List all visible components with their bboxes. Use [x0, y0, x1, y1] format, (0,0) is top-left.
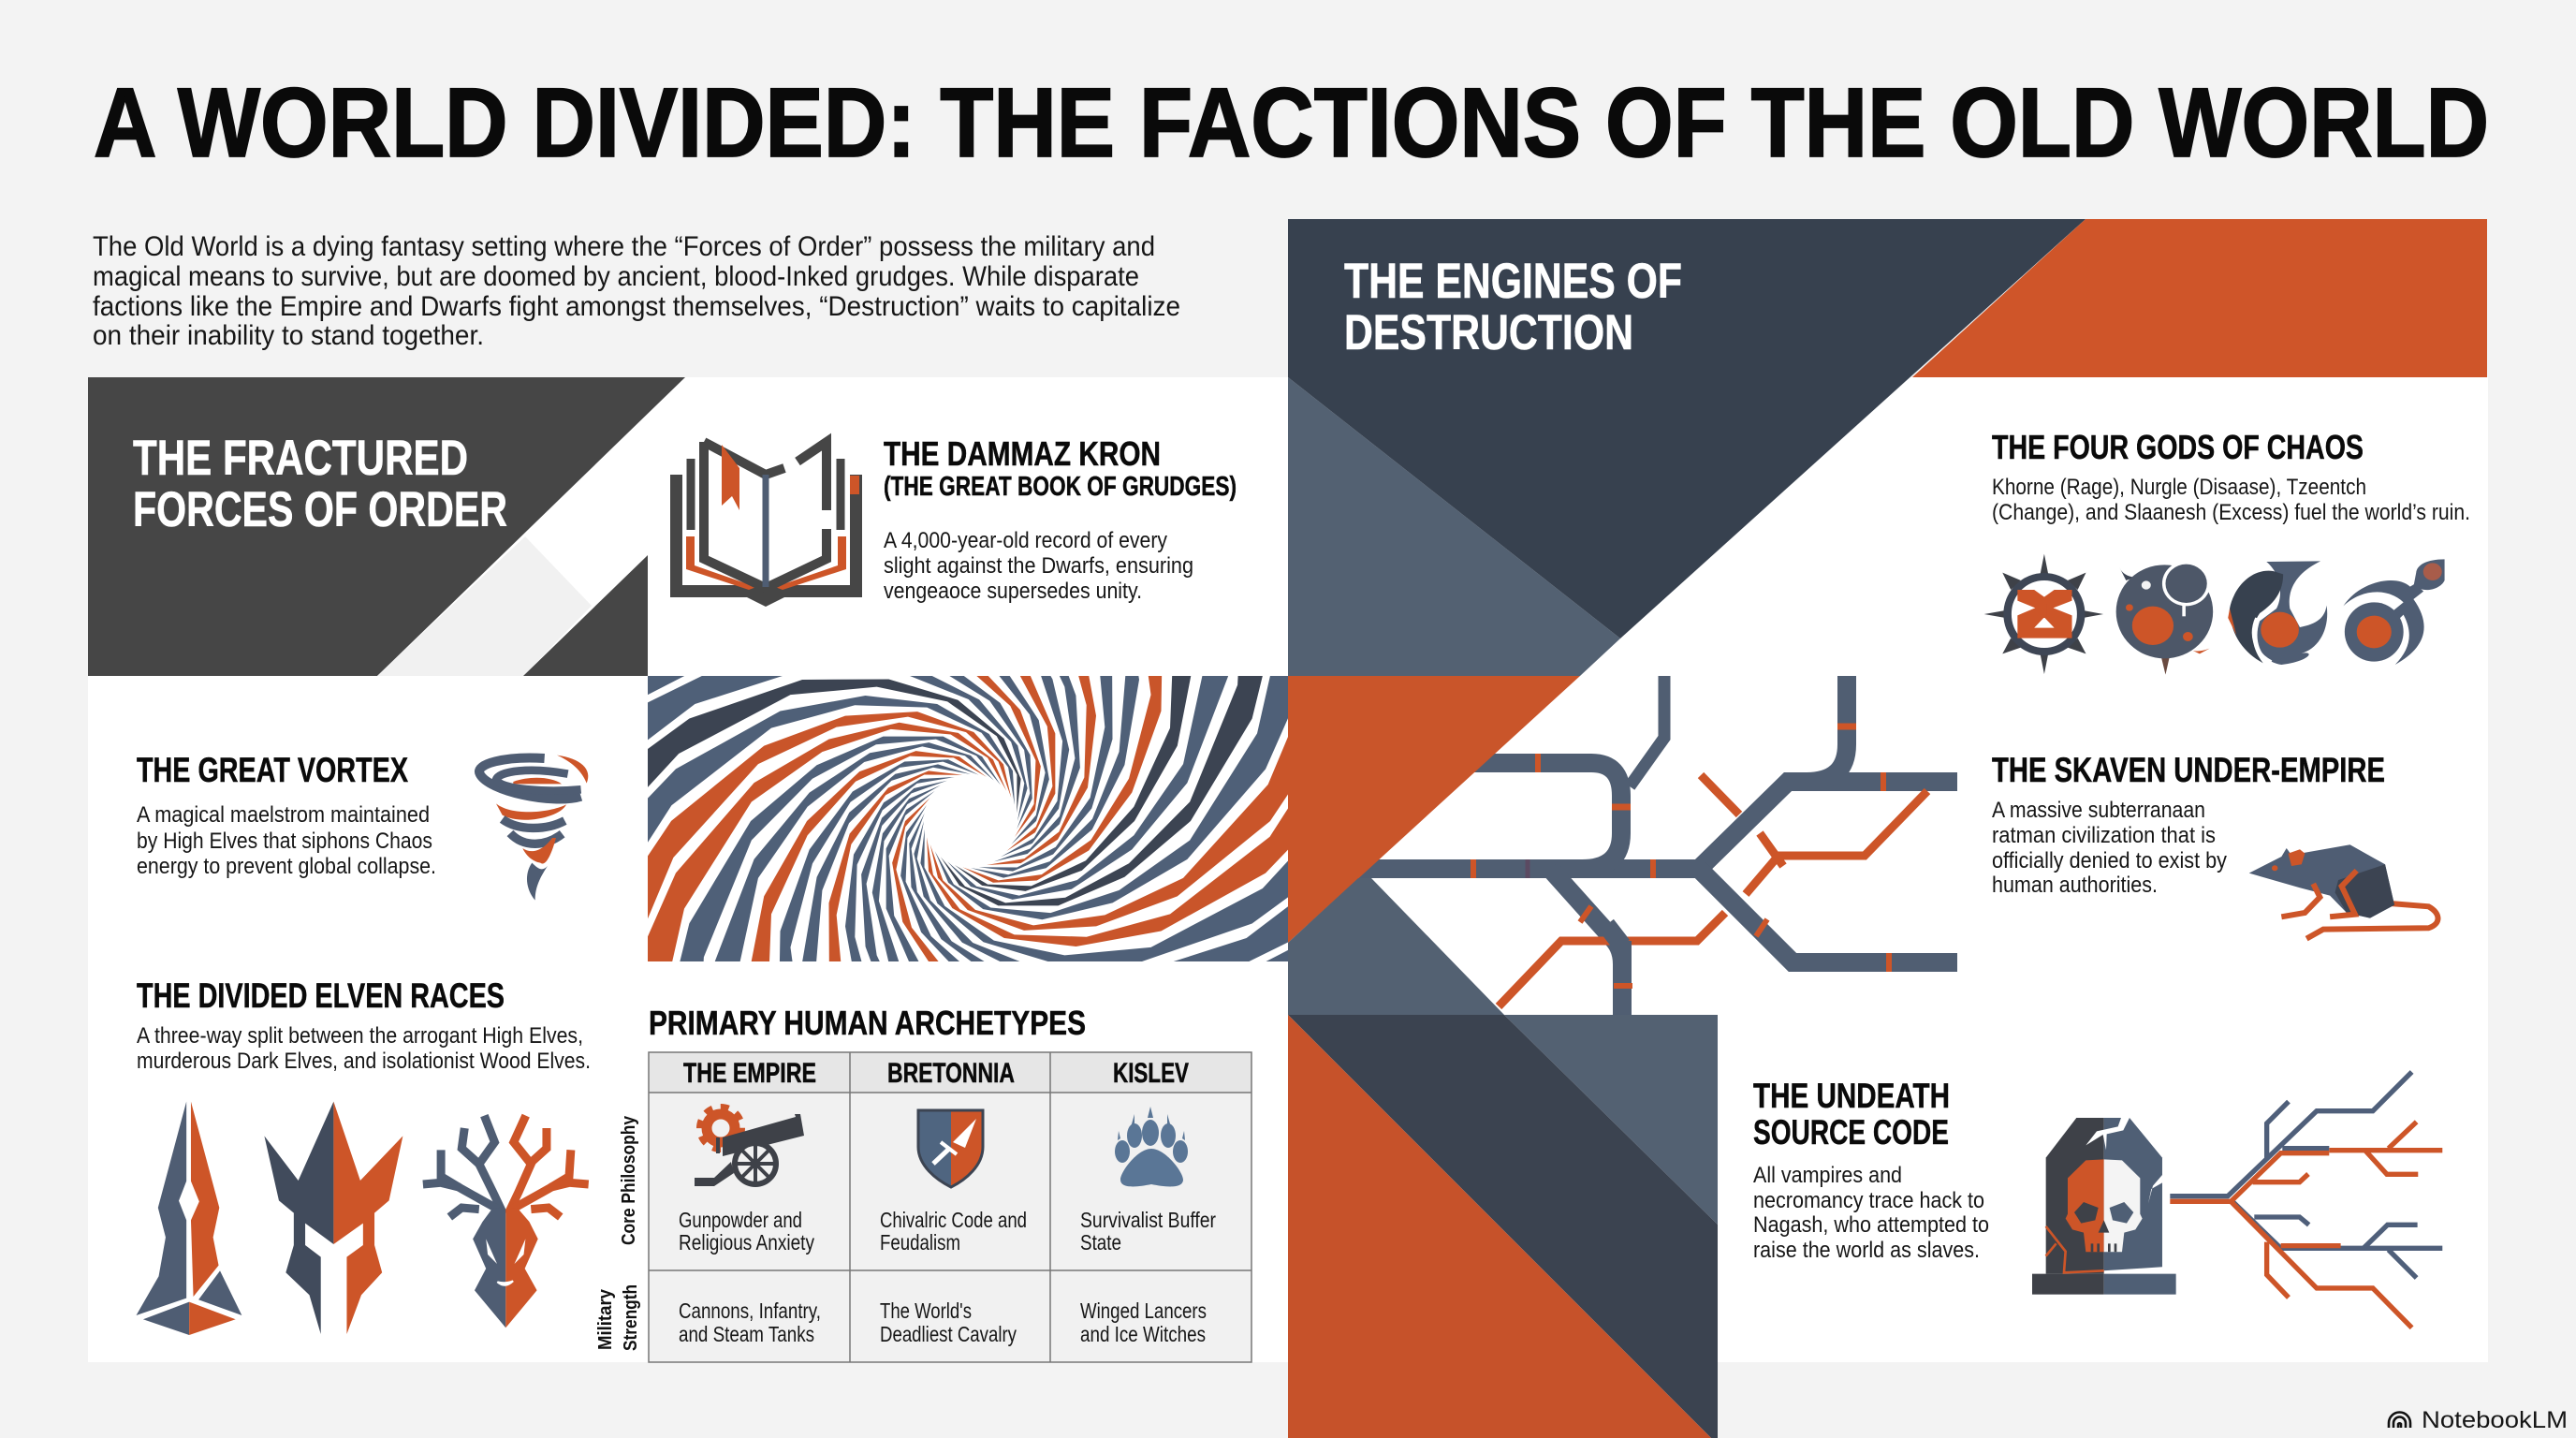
row label: military strength [595, 1284, 641, 1351]
intro text: magical means to survive, but are doomed by ancient, blood-Inked grudges. While disparate [93, 261, 1139, 292]
text: skaven under-empire: ratman civilization that is [1992, 823, 2216, 848]
row label: core philosophy: Core Philosophy [619, 1115, 639, 1245]
vortex artwork [648, 676, 1288, 961]
text: dammaz kron: slight against the Dwarfs, ensuring [884, 553, 1193, 579]
icon: tombstone skull [2032, 1118, 2176, 1295]
diagram: nagash lineage tree [2170, 1072, 2442, 1328]
row label: military strength: Military [595, 1288, 616, 1350]
intro text: The Old World is a dying fantasy setting where the “Forces of Order” possess the military and [93, 231, 1155, 262]
panel: forces of order [88, 377, 1406, 1362]
text: four gods of chaos: THE FOUR GODS OF CHAOS [1992, 428, 2364, 466]
text: dammaz kron: (THE GREAT BOOK OF GRUDGES) [884, 472, 1237, 502]
text: dammaz kron: A 4,000-year-old record of every [884, 528, 1167, 553]
header banner: fractured forces of order: THE FRACTURED [133, 431, 468, 486]
cell text: military strength: and Ice Witches [1080, 1322, 1206, 1346]
icon: nurgle [2116, 561, 2213, 675]
text: divided elven races: A three-way split between the arrogant High Elves, [137, 1023, 583, 1049]
cell text: military strength: Winged Lancers [1080, 1299, 1207, 1323]
cell text: core philosophy: State [1080, 1230, 1121, 1255]
row label: military strength: Strength [621, 1284, 641, 1351]
text: undeath source code: THE UNDEATH [1753, 1077, 1950, 1115]
table grid [649, 1052, 1251, 1362]
column headers: KISLEV [1113, 1058, 1189, 1089]
intro text: on their inability to stand together. [93, 320, 484, 351]
text: dammaz kron [884, 434, 1237, 604]
text: skaven under-empire [1992, 751, 2385, 898]
text: dammaz kron: vengeaoce supersedes unity. [884, 579, 1142, 604]
icon: rat [2249, 844, 2437, 939]
text: skaven under-empire: A massive subterranaan [1992, 798, 2205, 823]
cell text: core philosophy: Survivalist Buffer [1080, 1208, 1216, 1232]
cell text: core philosophy [679, 1208, 1216, 1255]
table: primary human archetypes [595, 1004, 1251, 1362]
icon: tzeentch [2228, 561, 2327, 665]
text: skaven under-empire: THE SKAVEN UNDER-EMPIRE [1992, 751, 2385, 789]
text: undeath source code: Nagash, who attempted to [1753, 1212, 1989, 1238]
cell text: core philosophy: Gunpowder and [679, 1208, 802, 1232]
cell text: core philosophy: Chivalric Code and [880, 1208, 1027, 1232]
column headers: BRETONNIA [887, 1058, 1015, 1089]
column headers [683, 1058, 1189, 1089]
text: divided elven races: THE DIVIDED ELVEN RACES [137, 976, 505, 1015]
background geometry [1288, 219, 2487, 1438]
cell text: military strength: The World's [880, 1299, 972, 1323]
intro text [93, 231, 1180, 351]
text: undeath source code [1753, 1077, 1989, 1263]
text: undeath source code: SOURCE CODE [1753, 1113, 1949, 1152]
icon: book of grudges [670, 442, 862, 607]
text: undeath source code: raise the world as slaves. [1753, 1238, 1980, 1263]
cell text: core philosophy: Feudalism [880, 1230, 960, 1255]
icon: high elves spire [137, 1102, 242, 1335]
header banner: fractured forces of order [88, 377, 685, 676]
text: divided elven races: murderous Dark Elves, and isolationist Wood Elves. [137, 1049, 591, 1074]
diagram: skaven tunnels [1348, 676, 1957, 1020]
cell text: military strength: Deadliest Cavalry [880, 1322, 1017, 1346]
icon: bretonnia shield [918, 1110, 983, 1187]
text: undeath source code: All vampires and [1753, 1163, 1902, 1188]
text: dammaz kron: THE DAMMAZ KRON [884, 434, 1161, 473]
header: engines of destruction [1344, 254, 1682, 360]
text: skaven under-empire: officially denied to exist by [1992, 848, 2227, 873]
text: four gods of chaos [1992, 428, 2470, 525]
text: divided elven races [137, 976, 591, 1074]
text: great vortex: THE GREAT VORTEX [137, 751, 408, 789]
header: engines of destruction: DESTRUCTION [1344, 305, 1633, 360]
cell text: military strength: and Steam Tanks [679, 1322, 814, 1346]
text: skaven under-empire: human authorities. [1992, 873, 2158, 898]
column headers: THE EMPIRE [683, 1058, 816, 1089]
cell text: military strength [679, 1299, 1207, 1346]
text: great vortex: by High Elves that siphons Chaos [137, 829, 432, 854]
icon: dark elves helm [264, 1102, 402, 1334]
cell text: military strength: Cannons, Infantry, [679, 1299, 821, 1323]
icon: bear paw [1115, 1107, 1188, 1186]
text: four gods of chaos: Khorne (Rage), Nurgle (Disaase), Tzeentch [1992, 475, 2366, 500]
text: great vortex: A magical maelstrom maintained [137, 802, 430, 828]
intro text: factions like the Empire and Dwarfs fight amongst themselves, “Destruction” waits to capitalize [93, 291, 1180, 322]
icon: cannon and gear [695, 1107, 804, 1186]
table heading: PRIMARY HUMAN ARCHETYPES [649, 1004, 1086, 1042]
icon: wood elves stag [423, 1116, 589, 1328]
header banner: fractured forces of order: FORCES OF ORDER [133, 482, 507, 537]
text: four gods of chaos: (Change), and Slaanesh (Excess) fuel the world’s ruin. [1992, 500, 2470, 525]
icon: slaanesh [2343, 559, 2445, 665]
header: engines of destruction: THE ENGINES OF [1344, 254, 1682, 309]
text: great vortex: energy to prevent global collapse. [137, 854, 436, 879]
icon: tornado [479, 756, 588, 901]
cell text: core philosophy: Religious Anxiety [679, 1230, 814, 1255]
text: great vortex [137, 751, 436, 879]
text: undeath source code: necromancy trace hack to [1753, 1188, 1984, 1213]
panel: engines of destruction [1288, 219, 2488, 1438]
icon: khorne [1984, 554, 2103, 674]
footer logo: notebooklm: NotebookLM [2422, 1407, 2568, 1433]
